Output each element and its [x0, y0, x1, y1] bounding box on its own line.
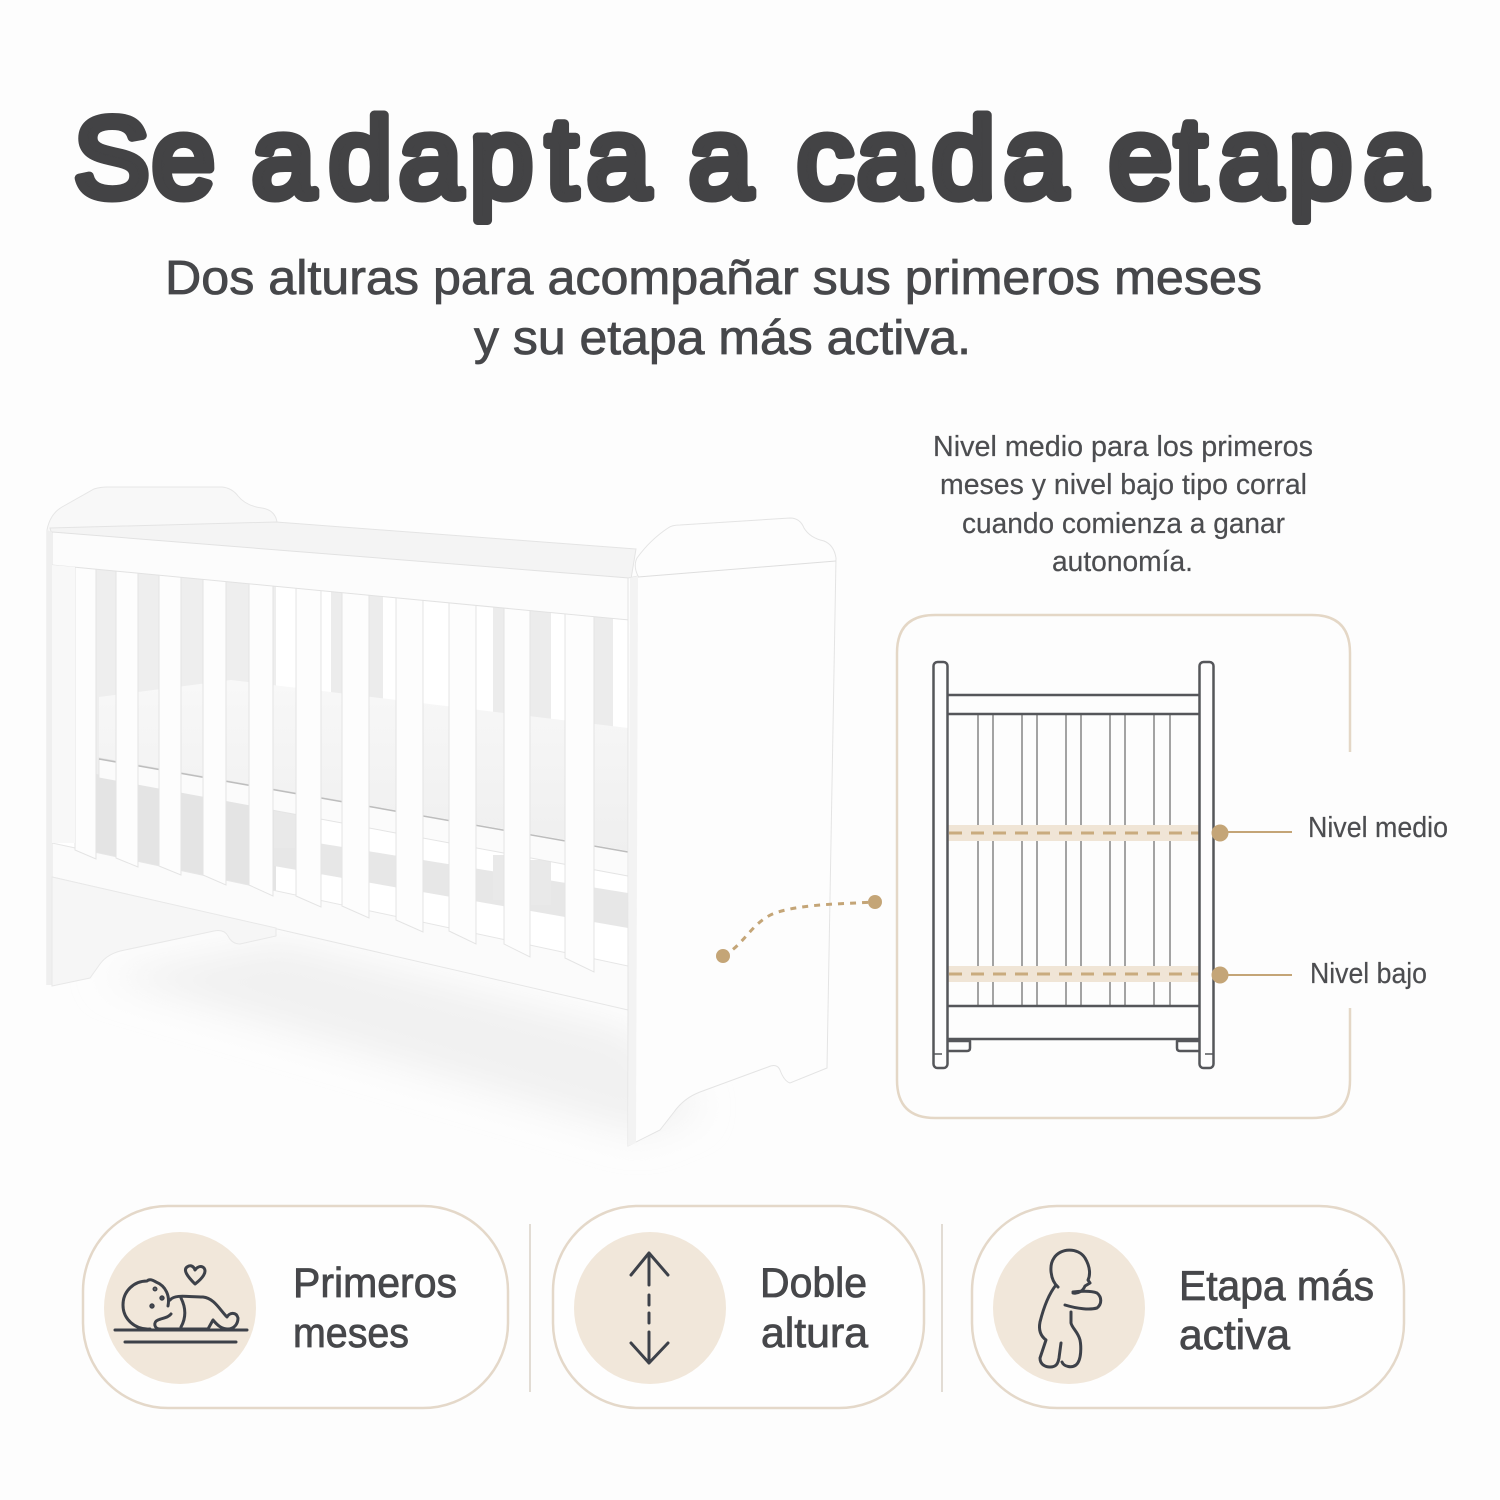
left post — [47, 530, 52, 985]
top rail — [52, 532, 629, 620]
level bands — [947, 825, 1199, 982]
subtitle: y su etapa más activa. — [474, 312, 971, 365]
dotted callout connector — [716, 895, 882, 963]
mattress support — [99, 758, 628, 876]
title: cada — [797, 95, 1067, 221]
floor shadow — [100, 940, 700, 1135]
label: Primeros — [293, 1259, 457, 1306]
label: meses — [293, 1309, 409, 1356]
label — [293, 1259, 457, 1356]
level marker: medio — [1212, 812, 1448, 844]
icon: standing baby — [1039, 1250, 1101, 1367]
icon: double arrow — [631, 1253, 668, 1363]
left leg — [52, 877, 276, 986]
feature pill: primeros meses — [83, 1206, 508, 1408]
title: etapa — [1109, 95, 1427, 221]
slats — [75, 560, 594, 972]
icon: sleeping baby — [115, 1266, 247, 1342]
description text: Nivel medio para los primeros — [933, 431, 1313, 463]
crib photo — [47, 487, 836, 1146]
back slats — [331, 585, 613, 775]
label — [1179, 1262, 1374, 1358]
back of crib — [52, 560, 629, 970]
lower background — [75, 770, 276, 925]
panel: height diagram — [897, 615, 1448, 1118]
title — [74, 95, 1427, 221]
feature pill: doble altura — [553, 1206, 924, 1408]
description text: cuando comienza a ganar — [962, 508, 1285, 540]
right side panel — [628, 518, 836, 1146]
crib frame outline — [934, 662, 1214, 1068]
level marker: bajo: Nivel bajo — [1310, 958, 1427, 990]
description text: meses y nivel bajo tipo corral — [940, 469, 1307, 501]
slats diagram — [978, 714, 1170, 1006]
left headboard — [47, 487, 277, 985]
description text: autonomía. — [1052, 546, 1193, 578]
label: Etapa más — [1179, 1262, 1374, 1309]
level marker: medio: Nivel medio — [1308, 812, 1448, 844]
title: a — [689, 95, 752, 221]
label: Doble — [760, 1259, 867, 1306]
subtitle — [165, 252, 1262, 365]
level marker: bajo — [1212, 958, 1427, 990]
description text — [933, 431, 1313, 578]
label: altura — [761, 1309, 869, 1356]
panel border — [897, 615, 1350, 1118]
title: Se — [74, 95, 215, 221]
label — [760, 1259, 869, 1356]
label: activa — [1179, 1311, 1291, 1358]
title: adapta — [252, 95, 650, 221]
feature pill: etapa mas activa — [972, 1206, 1404, 1408]
bottom rail — [52, 843, 628, 1010]
back rail — [50, 522, 636, 585]
subtitle: Dos alturas para acompañar sus primeros meses — [165, 252, 1262, 305]
mattress — [99, 680, 628, 851]
